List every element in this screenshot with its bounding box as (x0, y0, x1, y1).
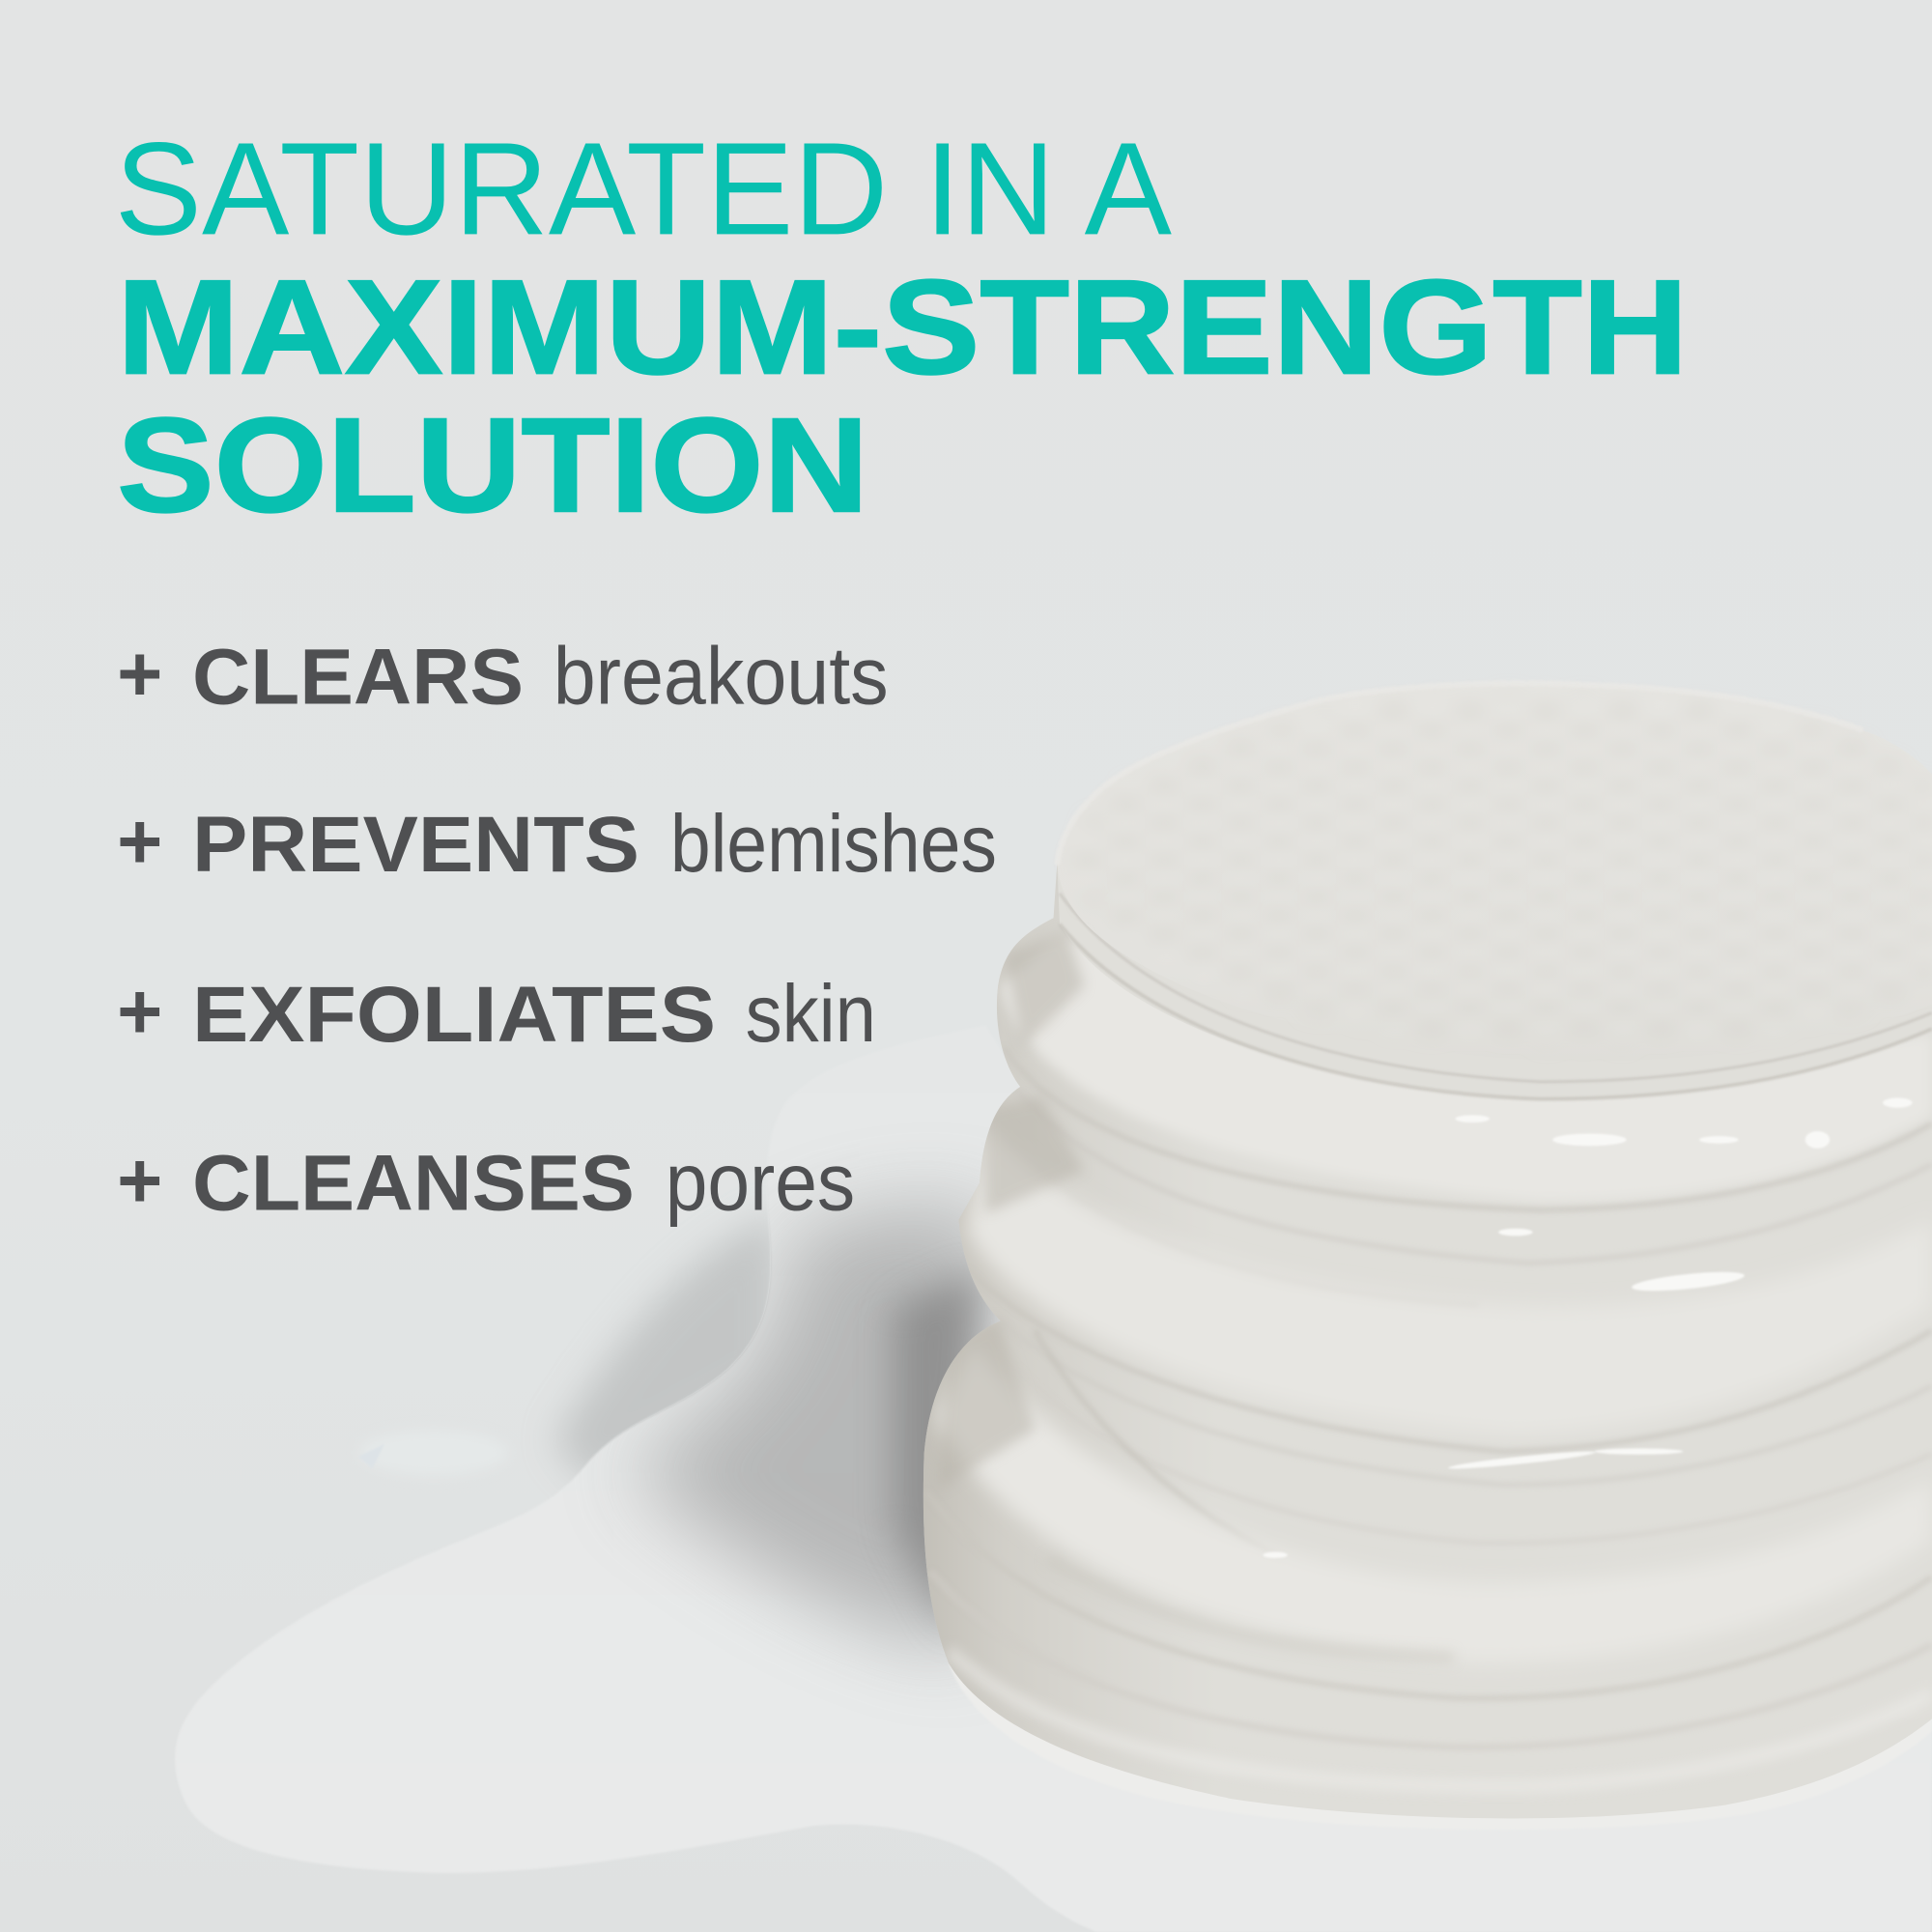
benefit: prevents blemishes (117, 798, 997, 889)
benefits list (117, 630, 997, 1228)
benefit: exfoliates skin: skin (746, 968, 876, 1059)
pad 2 rim and layers (999, 940, 1932, 1264)
left ragged ends (936, 930, 1084, 1491)
small milk droplet (358, 1431, 508, 1475)
outer shadow on bare surface (554, 1213, 779, 1485)
benefit: clears breakouts: + (117, 631, 162, 719)
specular highlights (1263, 1097, 1913, 1558)
pad 4 rim and layers (926, 1343, 1932, 1787)
top pad side wall (1057, 863, 1932, 1099)
title line 3: SOLUTION (117, 390, 868, 540)
benefit: prevents blemishes: blemishes (670, 798, 997, 889)
title line 2: MAXIMUM-STRENGTH (117, 252, 1688, 402)
benefit: exfoliates skin (117, 968, 876, 1059)
benefit: prevents blemishes: PREVENTS (192, 801, 639, 889)
benefit: clears breakouts: CLEARS (192, 633, 524, 721)
benefit: cleanses pores (117, 1137, 855, 1228)
benefit: clears breakouts: breakouts (554, 630, 889, 721)
benefit: cleanses pores: CLEANSES (192, 1140, 635, 1228)
cast shadow on the milk (629, 1207, 992, 1651)
benefit: exfoliates skin: EXFOLIATES (192, 971, 716, 1059)
benefit: cleanses pores: + (117, 1137, 162, 1225)
title (115, 114, 1688, 540)
pad 3 rim and layers (962, 1134, 1932, 1526)
milk pool at stack base (950, 1665, 970, 1692)
stack of cotton pads (912, 683, 1932, 1836)
milk puddle (175, 1025, 1932, 1932)
stack body (923, 866, 1932, 1818)
top pad surface (1057, 683, 1932, 1062)
benefit: prevents blemishes: + (117, 798, 162, 886)
benefit: cleanses pores: pores (666, 1137, 855, 1228)
benefit: exfoliates skin: + (117, 968, 162, 1056)
benefit: clears breakouts (117, 630, 889, 721)
title line 1: SATURATED IN A (115, 114, 1172, 262)
